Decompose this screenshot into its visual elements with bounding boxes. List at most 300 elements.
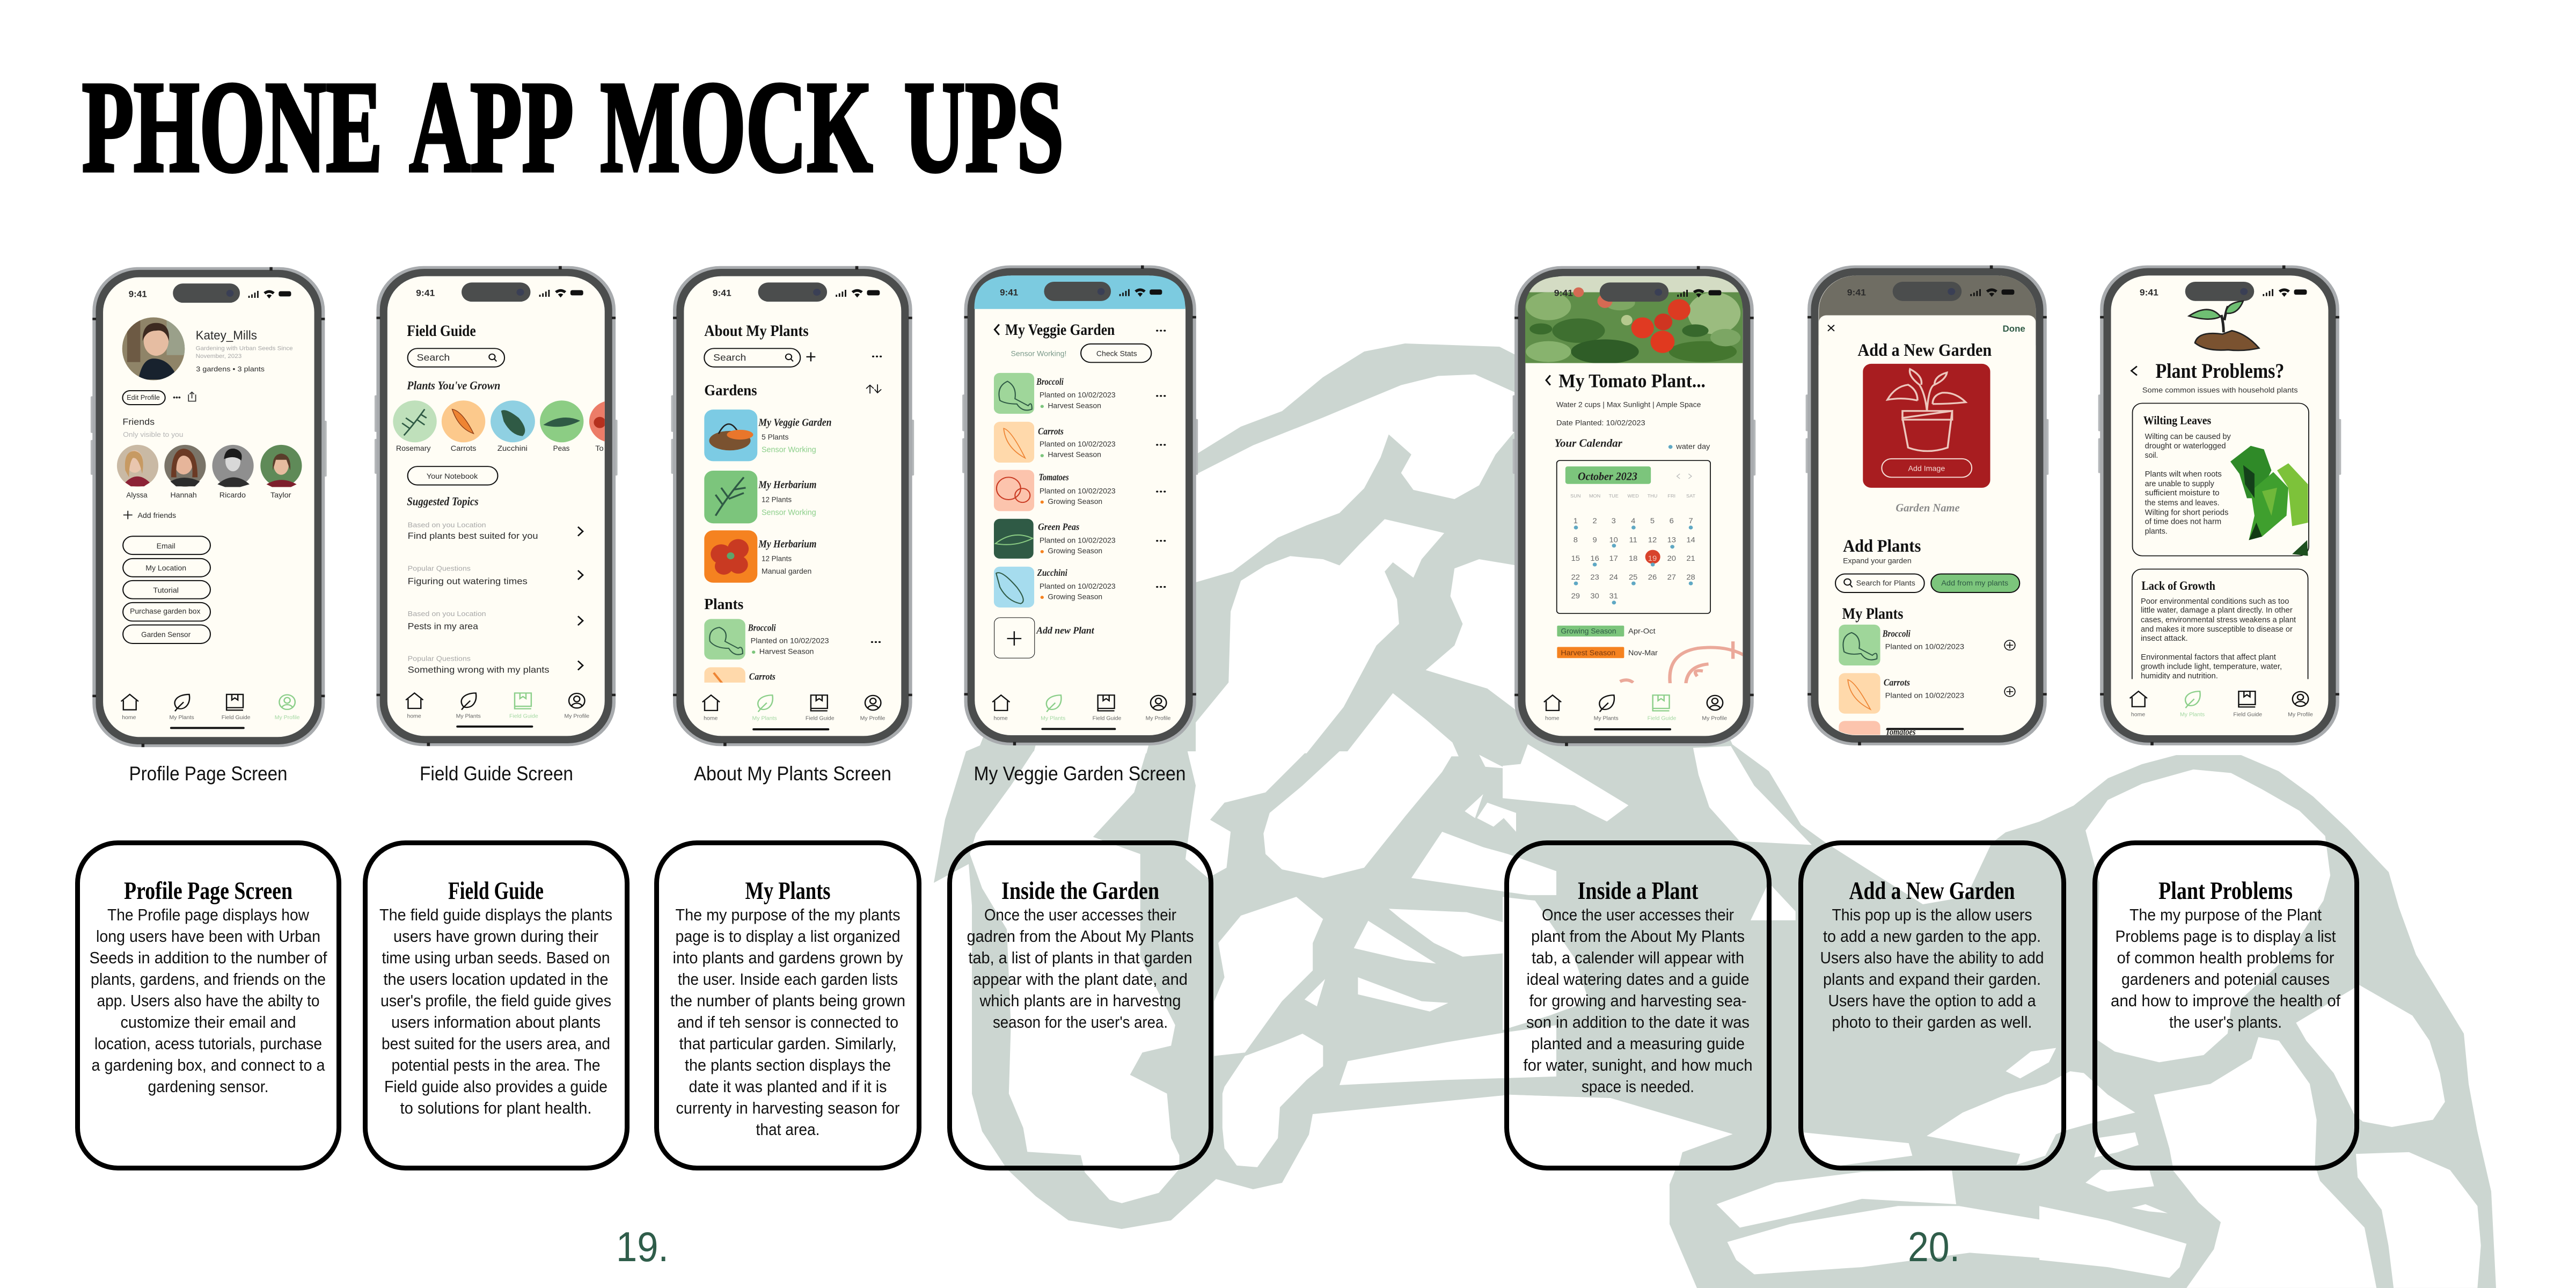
card: Field Guide: users have grown during their	[393, 927, 598, 946]
phone: Field Guide Screen	[375, 266, 633, 746]
garden list: My Veggie Garden	[758, 417, 831, 429]
bottom navigation	[1544, 695, 1727, 730]
bottom navigation: My Profile	[275, 715, 300, 721]
card: Lack of Growth: growth include light, temperature, water,	[2141, 663, 2282, 671]
calendar: October 2023	[1578, 470, 1637, 482]
check stats button	[1081, 344, 1151, 362]
phones: About My Plants and Veggie Garden	[671, 265, 1198, 746]
card: Add a New Garden: This pop up is the allow users	[1832, 905, 2032, 924]
garden image tile: Add Image	[1908, 465, 1945, 473]
card: Inside a Plant: for growing and harvesting sea-	[1529, 991, 1746, 1010]
phone: About My Plants Screen: Plants	[704, 596, 743, 613]
page number 19: 19.	[616, 1223, 669, 1270]
calendar: 19	[1648, 554, 1657, 563]
calendar: 28	[1686, 573, 1695, 582]
bottom navigation	[702, 695, 885, 730]
phone: Profile Page Screen	[91, 267, 327, 747]
calendar: 13	[1667, 536, 1676, 544]
calendar: TUE	[1609, 493, 1619, 499]
card: Wilting Leaves: Wilting Leaves	[2143, 414, 2211, 427]
card: My Plants: that area.	[756, 1120, 820, 1139]
calendar: 12	[1648, 536, 1657, 544]
card: Inside a Plant: Once the user accesses their	[1542, 905, 1734, 924]
veggie garden plant list	[994, 373, 1165, 608]
search bar: Search	[417, 352, 450, 363]
veggie garden plant list: Zucchini	[1037, 567, 1067, 579]
card: Field Guide: The field guide displays the plants	[379, 905, 612, 924]
card: Field Guide: potential pests in the area. The	[392, 1056, 600, 1074]
card: Profile Page Screen: Seeds in addition to the number of	[89, 948, 327, 967]
search bar: Search	[713, 352, 746, 363]
card: Field Guide: user's profile, the field guide gives	[380, 991, 611, 1010]
phone: Profile Page Screen: Katey_Mills	[196, 328, 257, 342]
calendar: 15	[1571, 554, 1580, 563]
card: Wilting Leaves: Plants wilt when roots	[2145, 470, 2222, 479]
veggie garden plant list: Growing Season	[1048, 593, 1102, 601]
veggie garden plant list: Growing Season	[1048, 497, 1102, 506]
calendar: 5	[1650, 517, 1655, 525]
check stats button: Check Stats	[1096, 350, 1137, 358]
veggie garden plant list: Planted on 10/02/2023	[1040, 487, 1116, 495]
phone: Profile Page Screen: Friends	[122, 416, 155, 427]
profile action buttons	[123, 536, 210, 643]
card: Plant Problems: of common health problems for	[2117, 948, 2334, 967]
profile action buttons: Purchase garden box	[130, 608, 200, 616]
growing and harvest season legend: Growing Season	[1561, 627, 1616, 636]
bottom navigation: My Plants	[1041, 716, 1065, 721]
bottom navigation: home	[122, 715, 136, 721]
phone: Add a New Garden: Done	[2003, 324, 2025, 334]
phone captions: About My Plants Screen	[694, 763, 891, 785]
phone: Profile Page Screen: Taylor	[270, 492, 291, 500]
garden image tile	[1863, 364, 1990, 488]
bottom navigation: home	[993, 716, 1008, 721]
bottom navigation: My Profile	[1146, 716, 1171, 721]
veggie garden plant list: Tomatoes	[1038, 472, 1069, 483]
calendar: 25	[1629, 573, 1637, 582]
card: Profile Page Screen: app. Users also have the abilty to	[97, 991, 320, 1010]
calendar	[1557, 460, 1710, 613]
veggie garden plant list: Harvest Season	[1048, 402, 1101, 410]
bottom navigation: My Plants	[1594, 716, 1619, 721]
card: Plant Problems: Plant Problems	[2158, 877, 2293, 905]
calendar: MON	[1589, 493, 1600, 499]
card: My Plants: date it was planted and if it is	[689, 1077, 887, 1096]
notebook button: Your Notebook	[427, 472, 478, 481]
add plant buttons: Add from my plants	[1941, 579, 2008, 588]
calendar: 11	[1629, 536, 1637, 544]
profile action buttons: My Location	[145, 564, 186, 573]
card: Inside the Garden: tab, a list of plants in that garden	[968, 948, 1192, 967]
card: My Plants: the user. Inside each garden lists	[678, 970, 898, 989]
card: Inside a Plant: for water, sunight, and how much	[1523, 1056, 1753, 1074]
garden list: 12 Plants	[762, 496, 792, 504]
suggested topics list: Something wrong with my plants	[408, 664, 550, 675]
phone: Profile Page Screen: Only visible to you	[123, 430, 183, 438]
phone captions: My Veggie Garden Screen	[974, 763, 1186, 785]
calendar: 27	[1667, 573, 1676, 582]
calendar: 6	[1670, 517, 1674, 525]
phone: About My Plants Screen	[671, 266, 914, 746]
card: Profile Page Screen: long users have been with Urban	[96, 927, 320, 946]
bottom navigation: Field Guide	[509, 714, 538, 719]
veggie garden plant list: Planted on 10/02/2023	[1040, 441, 1116, 449]
growing and harvest season legend: Harvest Season	[1561, 649, 1615, 657]
card: Field Guide	[365, 843, 627, 1168]
my plants list: Broccoli	[1882, 628, 1911, 639]
card: Lack of Growth: Environmental factors that affect plant	[2141, 653, 2277, 662]
card: Profile Page Screen: customize their email and	[120, 1013, 296, 1031]
bottom navigation: My Profile	[564, 714, 590, 719]
growing and harvest season legend	[1557, 626, 1658, 658]
calendar: 17	[1609, 554, 1618, 563]
add new plant tile	[994, 618, 1094, 658]
card: My Plants: My Plants	[745, 877, 831, 905]
phone: Plant Problems: Some common issues with household plants	[2142, 386, 2298, 394]
card: Lack of Growth: insect attack.	[2141, 634, 2188, 643]
card: Inside the Garden: season for the user's area.	[993, 1013, 1168, 1031]
calendar: 14	[1686, 536, 1695, 544]
card: Wilting Leaves: the stems and leaves.	[2145, 499, 2220, 507]
phone: Field Guide Screen: Peas	[553, 444, 569, 453]
bottom navigation: home	[1545, 716, 1560, 721]
card: Add a New Garden: photo to their garden as well.	[1832, 1013, 2032, 1031]
phone: Add a New Garden: Expand your garden	[1843, 557, 1912, 565]
veggie garden plant list: Carrots	[1038, 426, 1064, 437]
phone: Add a New Garden: Add a New Garden	[1857, 341, 1992, 360]
card: Lack of Growth: Lack of Growth	[2141, 579, 2215, 593]
calendar: 2	[1592, 517, 1597, 525]
phone: Add a New Garden: Garden Name	[1896, 502, 1960, 514]
card: Add a New Garden: Users have the option to add a	[1828, 991, 2036, 1010]
card: Inside the Garden: appear with the plant date, and	[973, 970, 1188, 989]
phone: My Tomato Plant: Date Planted: 10/02/2023	[1556, 419, 1645, 427]
suggested topics list: Pests in my area	[408, 621, 478, 631]
card: Wilting Leaves	[2133, 403, 2309, 556]
bottom navigation	[992, 695, 1171, 730]
phone: Field Guide Screen: To	[595, 444, 604, 453]
card: Inside a Plant: ideal watering dates and a guide	[1526, 970, 1750, 989]
calendar: 22	[1571, 573, 1580, 582]
card: Inside the Garden: Inside the Garden	[1001, 877, 1159, 905]
phone: Add a New Garden: My Plants	[1842, 604, 1903, 623]
phones: Profile Page and Field Guide	[91, 266, 633, 747]
card: Field Guide: time using urban seeds. Based on	[382, 948, 610, 967]
veggie garden plant list: Green Peas	[1038, 522, 1079, 532]
card: Plant Problems: the user's plants.	[2169, 1013, 2282, 1031]
garden list: 5 Plants	[762, 434, 788, 442]
card: Plant Problems: The my purpose of the Plant	[2129, 905, 2322, 924]
plant list: Harvest Season	[759, 648, 814, 656]
calendar: 8	[1574, 536, 1578, 544]
icon: sprout in soil	[2189, 301, 2259, 350]
bottom navigation: home	[2131, 712, 2146, 718]
calendar: 23	[1590, 573, 1599, 582]
calendar: 4	[1631, 517, 1635, 525]
phone: Profile Page Screen: Gardening with Urban Seeds Since	[196, 346, 293, 352]
card: My Plants: the number of plants being grown	[670, 991, 905, 1010]
phone: My Veggie Garden Screen: Sensor Working!	[1011, 350, 1066, 358]
veggie garden plant list: Planted on 10/02/2023	[1040, 582, 1116, 591]
card: Wilting Leaves: Wilting for short periods	[2145, 509, 2228, 517]
bottom navigation: Field Guide	[1093, 716, 1122, 721]
card: Inside the Garden	[950, 843, 1211, 1168]
card: Wilting Leaves: soil.	[2145, 451, 2158, 460]
phone: Profile Page Screen: Ricardo	[219, 492, 246, 500]
card: Add a New Garden	[1801, 843, 2064, 1168]
phone: Profile Page Screen: Alyssa	[126, 492, 148, 500]
card: Field Guide: best suited for the users area, and	[382, 1034, 610, 1053]
card: My Plants: into plants and gardens grown by	[673, 948, 903, 967]
phone: About My Plants Screen: About My Plants	[704, 321, 809, 340]
phone: Field Guide Screen: Rosemary	[396, 444, 431, 453]
calendar: 24	[1609, 573, 1618, 582]
garden list: Sensor Working	[762, 509, 816, 517]
card: My Plants: and if teh sensor is connected to	[677, 1013, 898, 1031]
card: Profile Page Screen	[77, 843, 339, 1168]
my plants list: Carrots	[1884, 677, 1910, 688]
bottom navigation: Field Guide	[222, 715, 251, 721]
calendar: SUN	[1570, 493, 1580, 499]
edit profile button	[122, 391, 165, 405]
bottom navigation: My Profile	[1702, 716, 1727, 721]
calendar: SAT	[1686, 493, 1696, 499]
background plant illustration	[934, 343, 2496, 1288]
card: My Plants: The my purpose of the my plants	[675, 905, 901, 924]
card: Field Guide: Field guide also provides a guide	[384, 1077, 608, 1096]
phone: Profile Page Screen: Add friends	[138, 511, 176, 520]
card: Wilting Leaves: Wilting can be caused by	[2145, 433, 2231, 441]
garden list: My Herbarium	[758, 539, 816, 550]
plant list	[704, 619, 881, 683]
card: Field Guide: users information about plants	[391, 1013, 601, 1031]
phone: Field Guide Screen: Carrots	[451, 444, 476, 453]
phone: Add a New Garden: Tomatoes	[1885, 727, 1916, 737]
phone: My Tomato Plant: water day	[1675, 443, 1710, 451]
bottom navigation: Field Guide	[806, 716, 835, 721]
my plants list	[1839, 625, 2015, 730]
bottom navigation: Field Guide	[2233, 712, 2262, 718]
phone: Profile Page Screen: November, 2023	[196, 353, 241, 360]
suggested topics list: Figuring out watering times	[408, 576, 528, 586]
add plant buttons	[1835, 574, 2019, 592]
bottom navigation: My Profile	[2288, 712, 2313, 718]
phone: My Tomato Plant: My Tomato Plant...	[1558, 370, 1706, 392]
card: Plant Problems: Problems page is to display a list	[2116, 927, 2336, 946]
bottom navigation: home	[407, 714, 421, 719]
bottom navigation: home	[704, 716, 718, 721]
calendar: THU	[1648, 493, 1657, 499]
phone: My Veggie Garden Screen: My Veggie Garden	[1005, 320, 1115, 339]
garden list: My Herbarium	[758, 479, 816, 491]
title: PHONE APP MOCK UPS	[82, 54, 1064, 199]
calendar: 30	[1590, 592, 1599, 601]
my plants list: Planted on 10/02/2023	[1885, 692, 1964, 700]
phone captions	[129, 763, 1186, 785]
veggie garden plant list: Growing Season	[1048, 547, 1102, 555]
my plants list: Planted on 10/02/2023	[1885, 643, 1964, 651]
plant list: Carrots	[749, 671, 775, 682]
card: Lack of Growth: and makes it more susceptible to disease or	[2141, 625, 2293, 634]
card: Field Guide: to solutions for plant health.	[400, 1099, 591, 1117]
card: Inside the Garden: Once the user accesses their	[984, 905, 1176, 924]
calendar: 18	[1629, 554, 1637, 563]
veggie garden plant list: Broccoli	[1036, 377, 1064, 387]
calendar: WED	[1628, 493, 1639, 499]
card: Add a New Garden: Users also have the ability to add	[1820, 948, 2044, 967]
phones: Tomato Plant and Add a New Garden	[1513, 265, 2048, 769]
card: Inside a Plant: tab, a calender will appear with	[1532, 948, 1744, 967]
veggie garden plant list: Planted on 10/02/2023	[1040, 537, 1116, 545]
phone: Profile Page Screen: •••	[173, 393, 181, 401]
phone: About My Plants Screen: Gardens	[704, 382, 757, 399]
garden list: Manual garden	[762, 567, 811, 576]
card: Profile Page Screen: Profile Page Screen	[124, 877, 292, 905]
calendar: 9	[1592, 536, 1597, 544]
veggie garden plant list: Harvest Season	[1048, 451, 1101, 459]
card: Lack of Growth: little water, damage a plant directly. In other	[2141, 606, 2293, 615]
calendar: 16	[1590, 554, 1599, 563]
calendar: 10	[1609, 536, 1618, 544]
notebook button	[408, 466, 497, 485]
veggie garden plant list: Planted on 10/02/2023	[1040, 391, 1116, 399]
suggested topics list: Based on you Location	[408, 521, 486, 529]
add plant buttons: Search for Plants	[1856, 579, 1915, 588]
growing and harvest season legend: Nov-Mar	[1628, 649, 1658, 657]
calendar: 29	[1571, 592, 1580, 601]
profile avatar	[121, 317, 186, 381]
phone: Field Guide Screen: Suggested Topics	[407, 495, 479, 508]
tomato doodle	[1620, 641, 1744, 683]
edit profile button: Edit Profile	[127, 393, 160, 401]
phone: My Veggie Garden Screen	[962, 265, 1198, 745]
card: Inside a Plant: planted and a measuring guide	[1531, 1034, 1745, 1053]
card: Inside a Plant: plant from the About My Plants	[1531, 927, 1745, 946]
garden list: 12 Plants	[762, 555, 792, 563]
bottom navigation: My Plants	[752, 716, 777, 721]
bottom navigation	[121, 694, 300, 729]
card: Add a New Garden: to add a new garden to the app.	[1823, 927, 2041, 946]
card: My Plants: that particular garden. Similarly,	[679, 1034, 896, 1053]
card: Inside a Plant: son in addition to the date it was	[1526, 1013, 1750, 1031]
card: Inside the Garden: gadren from the About My Plants	[967, 927, 1194, 946]
card: Lack of Growth: humidity and nutrition.	[2141, 672, 2218, 680]
card: Lack of Growth	[2132, 569, 2308, 709]
card: Plant Problems	[2095, 843, 2357, 1168]
calendar: 31	[1609, 592, 1618, 601]
card: Inside a Plant	[1507, 843, 1769, 1168]
card: Inside a Plant: space is needed.	[1582, 1077, 1694, 1096]
card: Lack of Growth: cases, environmental stress weakens a plant	[2141, 616, 2296, 624]
growing and harvest season legend: Apr-Oct	[1628, 627, 1656, 636]
bottom navigation	[2130, 691, 2313, 718]
card: Profile Page Screen: plants, gardens, and friends on the	[91, 970, 326, 989]
wilting leaf image	[2230, 446, 2308, 556]
card: My Plants: page is to display a list organized	[675, 927, 901, 946]
card: Add a New Garden: Add a New Garden	[1849, 877, 2015, 905]
icon: share	[188, 392, 196, 401]
suggested topics list: Based on you Location	[408, 610, 486, 618]
friends avatars	[117, 445, 302, 487]
phone: My Tomato Plant: Your Calendar	[1554, 437, 1622, 450]
card: Inside a Plant: Inside a Plant	[1578, 877, 1699, 905]
card: Wilting Leaves: are unable to supply	[2145, 480, 2214, 488]
card: Inside the Garden: which plants are in harvestng	[979, 991, 1181, 1010]
card: Plant Problems: gardeners and potenial causes	[2121, 970, 2330, 989]
profile action buttons: Tutorial	[153, 587, 179, 595]
bottom navigation: My Plants	[2180, 712, 2205, 718]
phone: Add a New Garden	[1806, 265, 2048, 769]
suggested topics list: Find plants best suited for you	[408, 530, 538, 541]
phone captions: Profile Page Screen	[129, 763, 288, 785]
phone: My Tomato Plant	[1513, 266, 1755, 746]
card: My Plants: currenty in harvesting season for	[676, 1099, 899, 1117]
card: Lack of Growth: Poor environmental conditions such as too	[2141, 597, 2289, 606]
plant list: Planted on 10/02/2023	[751, 637, 829, 645]
card: Profile Page Screen: The Profile page displays how	[107, 905, 310, 924]
bottom navigation: My Plants	[456, 714, 481, 719]
calendar: FRI	[1667, 493, 1675, 499]
tomato plant photo	[1525, 276, 1743, 367]
phone: Profile Page Screen: 3 gardens • 3 plants	[196, 365, 265, 373]
garden list: Sensor Working	[762, 446, 816, 454]
card: Wilting Leaves: of time does not harm	[2145, 518, 2221, 526]
suggested topics list: Popular Questions	[408, 565, 471, 573]
search bar	[408, 348, 504, 367]
calendar: 3	[1612, 517, 1616, 525]
phone: Field Guide Screen: Field Guide	[407, 321, 476, 340]
page number 20: 20.	[1908, 1223, 1960, 1270]
phone: Field Guide Screen: Plants You've Grown	[406, 379, 500, 392]
phone captions: Field Guide Screen	[420, 763, 573, 785]
calendar: 7	[1688, 517, 1693, 525]
phone: Field Guide Screen: Zucchini	[497, 444, 528, 453]
card: Add a New Garden: plants and expand their garden.	[1823, 970, 2041, 989]
profile action buttons: Email	[157, 542, 175, 551]
bottom navigation: My Profile	[860, 716, 885, 721]
search bar	[704, 348, 800, 367]
calendar: 20	[1667, 554, 1676, 563]
calendar: 1	[1574, 517, 1578, 525]
card: My Plants	[657, 843, 919, 1168]
card: Field Guide: the users location updated in the	[383, 970, 609, 989]
suggested topics list: Popular Questions	[408, 655, 471, 662]
garden list	[704, 409, 831, 583]
calendar: 26	[1648, 573, 1657, 582]
phone: Plant Problems: Plant Problems?	[2155, 359, 2284, 383]
plant list: Broccoli	[748, 623, 776, 633]
card: Profile Page Screen: location, acess tutorials, purchase	[94, 1034, 322, 1053]
add new plant tile: Add new Plant	[1036, 625, 1094, 636]
phone: Add a New Garden: Add Plants	[1843, 537, 1921, 556]
card: Wilting Leaves: drought or waterlogged	[2145, 442, 2226, 450]
calendar: 21	[1686, 554, 1695, 563]
plant circles	[393, 400, 605, 442]
card: Profile Page Screen: gardening sensor.	[148, 1077, 268, 1096]
card: Profile Page Screen: a gardening box, and connect to a	[91, 1056, 325, 1074]
phone: Plant Problems	[2098, 265, 2341, 745]
card: Wilting Leaves: plants.	[2145, 528, 2168, 536]
bottom navigation: My Plants	[170, 715, 194, 721]
bottom navigation: Field Guide	[1648, 716, 1677, 721]
card: Wilting Leaves: sufficient moisture to	[2145, 489, 2220, 497]
suggested topics list	[408, 521, 583, 675]
card: Field Guide: Field Guide	[448, 877, 544, 905]
phone: Profile Page Screen: Hannah	[171, 492, 197, 500]
phone: My Tomato Plant: Water 2 cups | Max Sunlight | Ample Space	[1556, 401, 1701, 409]
bottom navigation	[406, 693, 590, 728]
icon: sort arrows	[866, 384, 881, 393]
